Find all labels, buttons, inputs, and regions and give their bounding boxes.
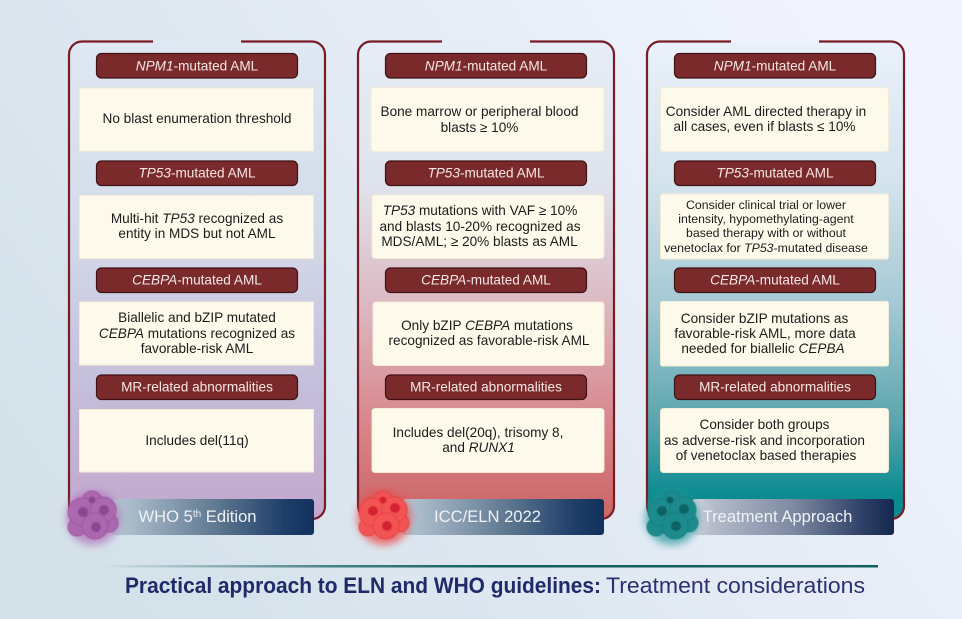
title: Practical approach to ELN and WHO guidelines: xyxy=(125,573,601,598)
text box: MR-related: and RUNX1 xyxy=(442,440,515,455)
text box: CEBPA xyxy=(373,302,604,366)
text box: TP53: intensity, hypomethylating-agent xyxy=(678,212,854,226)
heading: NPM1: NPM1-mutated AML xyxy=(714,58,837,74)
text box: TP53: TP53 mutations with VAF ≥ 10% xyxy=(383,203,577,218)
label bar: Treatment Approach: Treatment Approach xyxy=(703,507,852,526)
text box: NPM1: No blast enumeration threshold xyxy=(103,111,291,126)
panel: WHO 5th Edition xyxy=(66,42,325,545)
heading: NPM1 xyxy=(386,54,586,78)
text box: NPM1: blasts ≥ 10% xyxy=(441,120,518,135)
text box: TP53: entity in MDS but not AML xyxy=(118,226,276,241)
heading: CEBPA: CEBPA-mutated AML xyxy=(132,272,262,288)
heading: TP53: TP53-mutated AML xyxy=(427,166,545,180)
text box: NPM1: Bone marrow or peripheral blood xyxy=(381,104,578,119)
heading: CEBPA xyxy=(674,268,876,292)
panel frame xyxy=(358,42,614,519)
heading: NPM1: NPM1-mutated AML xyxy=(136,58,259,74)
text box: MR-related: Includes del(20q), trisomy 8, xyxy=(393,425,563,440)
text box: TP53: venetoclax for TP53-mutated disease xyxy=(664,241,868,255)
text box: CEBPA: CEBPA mutations recognized as xyxy=(99,326,295,341)
heading: NPM1 xyxy=(96,54,298,78)
text box: TP53 xyxy=(660,194,888,259)
icon: teal cell cluster xyxy=(645,491,699,545)
text box: TP53: Multi-hit TP53 recognized as xyxy=(111,211,283,226)
heading: MR-related: MR-related abnormalities xyxy=(410,380,562,394)
text box: TP53 xyxy=(372,195,604,258)
text box: CEBPA: Biallelic and bZIP mutated xyxy=(118,310,276,325)
label bar: WHO 5th Edition: th xyxy=(193,509,201,520)
heading: CEBPA: CEBPA-mutated AML xyxy=(710,272,840,288)
text box: MR-related: as adverse-risk and incorporation xyxy=(664,433,865,448)
heading: MR-related: MR-related abnormalities xyxy=(121,380,273,394)
text box: MR-related xyxy=(660,408,888,472)
text box: TP53: MDS/AML; ≥ 20% blasts as AML xyxy=(381,234,578,249)
text box: CEBPA: needed for biallelic CEPBA xyxy=(681,341,845,356)
text box: NPM1 xyxy=(80,88,314,151)
text box: MR-related: Includes del(11q) xyxy=(145,433,249,448)
label bar: Treatment Approach xyxy=(692,499,894,535)
text box: MR-related xyxy=(80,410,314,472)
title xyxy=(125,573,865,598)
text box: TP53: Consider clinical trial or lower xyxy=(686,198,846,212)
text box: CEBPA: Consider bZIP mutations as xyxy=(681,311,848,326)
heading: MR-related: MR-related abnormalities xyxy=(699,380,851,394)
heading: MR-related xyxy=(386,375,586,400)
heading: TP53: TP53-mutated AML xyxy=(138,166,256,180)
text box: MR-related: Consider both groups xyxy=(700,417,830,432)
divider line xyxy=(100,565,878,568)
text box: CEBPA xyxy=(80,302,314,365)
label bar: WHO 5th Edition: WHO 5 xyxy=(138,507,193,526)
panel frame xyxy=(69,42,325,519)
heading: TP53 xyxy=(96,161,298,186)
text box: NPM1: Consider AML directed therapy in xyxy=(666,104,866,119)
text box: TP53 xyxy=(80,196,314,258)
text box: CEBPA xyxy=(660,302,888,366)
heading: NPM1: NPM1-mutated AML xyxy=(425,58,548,74)
heading: CEBPA xyxy=(386,268,586,292)
heading: TP53: TP53-mutated AML xyxy=(716,166,834,180)
text box: MR-related xyxy=(372,408,604,472)
text box: CEBPA: favorable-risk AML xyxy=(141,341,254,356)
text box: CEBPA: Only bZIP CEBPA mutations xyxy=(401,318,573,333)
panel: Treatment Approach xyxy=(645,42,904,545)
text box: CEBPA: favorable-risk AML, more data xyxy=(674,326,856,341)
text box: NPM1 xyxy=(371,88,604,152)
heading: NPM1 xyxy=(674,54,876,78)
text box: NPM1 xyxy=(660,88,888,152)
label bar: ICC/ELN 2022 xyxy=(402,499,604,535)
icon: red cell cluster xyxy=(357,491,411,545)
heading: MR-related xyxy=(674,375,876,400)
text box: TP53: based therapy with or without xyxy=(686,226,847,240)
text box: MR-related: of venetoclax based therapies xyxy=(676,448,857,463)
label bar: ICC/ELN 2022: ICC/ELN 2022 xyxy=(434,507,541,526)
text box: CEBPA: recognized as favorable-risk AML xyxy=(389,333,590,348)
text box: TP53: and blasts 10-20% recognized as xyxy=(379,219,581,234)
panel frame xyxy=(647,42,904,519)
icon: purple cell cluster xyxy=(66,491,120,545)
label bar: WHO 5th Edition xyxy=(112,499,314,535)
heading: MR-related xyxy=(96,375,298,400)
heading: TP53 xyxy=(386,161,586,186)
label bar: WHO 5th Edition: Edition xyxy=(201,507,257,526)
title: Treatment considerations xyxy=(606,573,865,598)
panel: ICC/ELN 2022 xyxy=(357,42,614,545)
heading: TP53 xyxy=(674,161,876,186)
heading: CEBPA: CEBPA-mutated AML xyxy=(421,272,551,288)
heading: CEBPA xyxy=(96,268,298,292)
text box: NPM1: all cases, even if blasts ≤ 10% xyxy=(673,119,856,134)
